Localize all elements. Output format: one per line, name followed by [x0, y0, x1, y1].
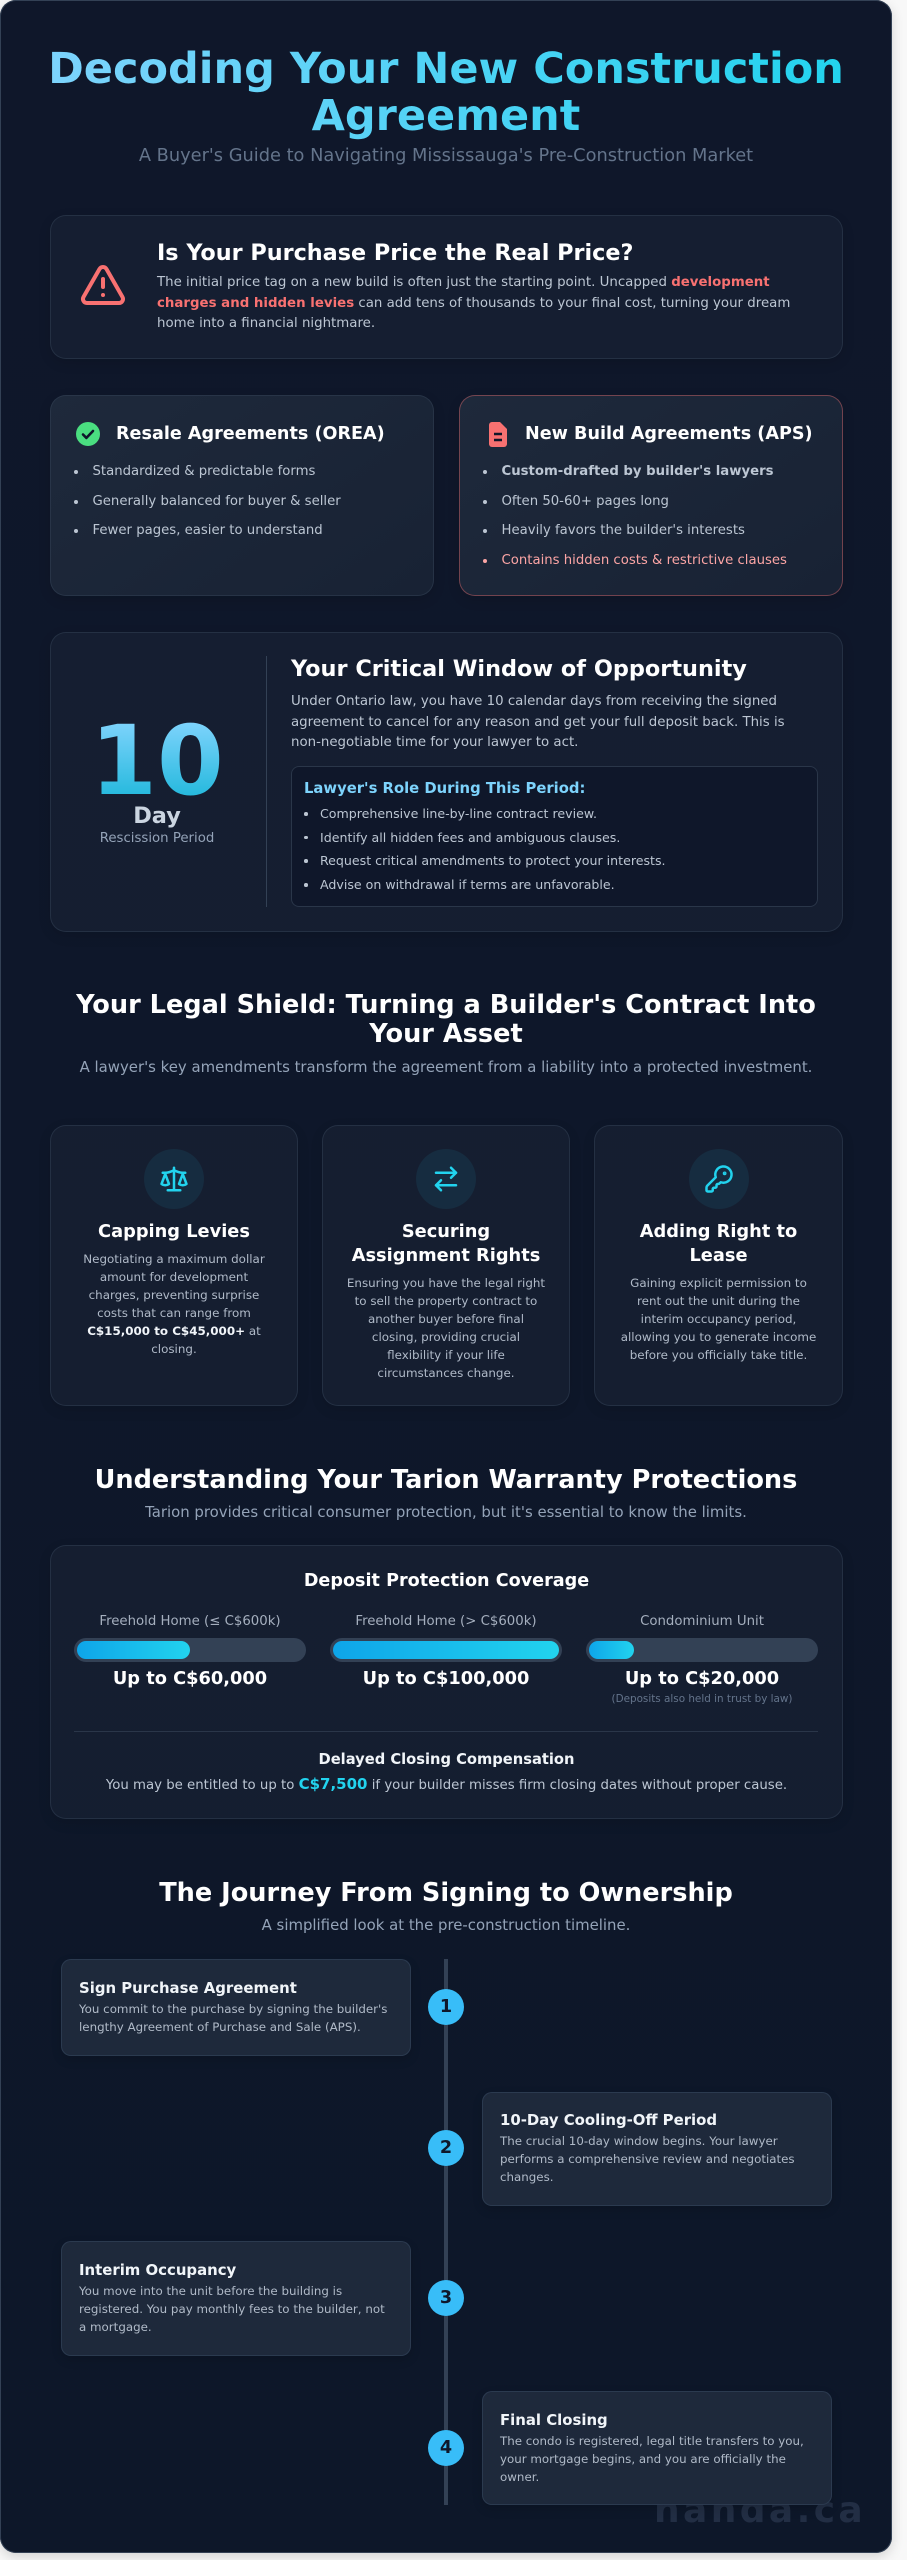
- step 1 marker: 1: [440, 1997, 452, 2017]
- subtitle: legal shield: A lawyer's key amendments transform the agreement from a liability into a protected investment.: [80, 1058, 812, 1076]
- step 1 text: You commit to the purchase by signing the builder's: [79, 2002, 387, 2016]
- list: new build features: [483, 464, 787, 568]
- step 4 text: [500, 2434, 804, 2484]
- text: price explanation: charges and hidden levies can add tens of thousands to your final cost, turning your dream: [157, 296, 790, 311]
- heading: resale: Resale Agreements (OREA): [116, 424, 385, 444]
- title: [0, 46, 892, 140]
- heading: deposit protection: Deposit Protection Coverage: [304, 1571, 589, 1591]
- value: freehold high: Up to C$100,000: [363, 1668, 529, 1689]
- card: assignment rights: [322, 1125, 570, 1406]
- heading: window: Your Critical Window of Opportunity: [291, 656, 747, 682]
- panel: new build agreements: [459, 395, 843, 596]
- watermark: nanda.ca: [654, 2490, 866, 2531]
- text: capping levies: charges, preventing surprise: [89, 1288, 259, 1302]
- heading: tarion: Understanding Your Tarion Warranty Protections: [95, 1465, 797, 1495]
- heading: new build: New Build Agreements (APS): [525, 424, 813, 444]
- panel: critical window: [50, 632, 843, 932]
- text: ontario law: [291, 694, 785, 750]
- step 4 text: your mortgage begins, and you are officially the: [500, 2452, 786, 2466]
- icon: scale: [144, 1149, 204, 1209]
- list: new build features: Custom-drafted by builder's lawyers: [502, 464, 774, 479]
- bar: freehold low: [74, 1638, 306, 1662]
- panel: purchase price warning: [50, 215, 843, 359]
- heading: delayed closing: Delayed Closing Compensation: [319, 1751, 574, 1768]
- step 3 marker: [428, 2280, 464, 2316]
- divider: [74, 1731, 818, 1732]
- text: right to lease: before you officially take title.: [630, 1348, 807, 1362]
- step 1 title: Sign Purchase Agreement: [79, 1979, 297, 1997]
- step 3 text: [79, 2284, 385, 2334]
- text: capping levies: amount for development: [100, 1270, 248, 1284]
- text: capping levies: Negotiating a maximum dollar: [83, 1252, 265, 1266]
- label: rescission period: Rescission Period: [100, 831, 214, 846]
- value: freehold low: Up to C$60,000: [113, 1668, 267, 1689]
- list: new build features: Heavily favors the builder's interests: [502, 523, 745, 538]
- heading: legal shield: Your Legal Shield: Turning a Builder's Contract Into: [76, 990, 816, 1020]
- heading: journey: The Journey From Signing to Ownership: [159, 1878, 733, 1908]
- timeline: [61, 1959, 832, 2505]
- text: assignment rights: flexibility if your life: [387, 1348, 505, 1362]
- step 3 text: You move into the unit before the building is: [79, 2284, 342, 2298]
- label: freehold high: Freehold Home (> C$600k): [355, 1614, 537, 1629]
- step 4 text: The condo is registered, legal title transfers to you,: [500, 2434, 804, 2448]
- bar: condominium: [586, 1638, 818, 1662]
- step 3 text: registered. You pay monthly fees to the builder, not: [79, 2302, 385, 2316]
- step 4 text: owner.: [500, 2470, 539, 2484]
- bar: freehold high: [330, 1638, 562, 1662]
- heading: real price: Is Your Purchase Price the Real Price?: [157, 240, 633, 266]
- heading: legal shield: [76, 990, 816, 1049]
- text: assignment rights: [347, 1276, 545, 1380]
- text: price explanation: The initial price tag on a new build is often just the starting point. Uncapped development: [157, 275, 770, 290]
- step 2 marker: 2: [440, 2138, 452, 2158]
- text: right to lease: [621, 1276, 816, 1362]
- icon: arrows: [416, 1149, 476, 1209]
- step 3 title: Interim Occupancy: [79, 2261, 236, 2279]
- list: resale features: [74, 464, 341, 538]
- text: assignment rights: to sell the property contract to: [355, 1294, 537, 1308]
- step 1 card: [61, 1959, 411, 2056]
- list: lawyer tasks: [304, 806, 666, 892]
- step 1 marker: [428, 1989, 464, 2025]
- text: capping levies: C$15,000 to C$45,000+ at: [87, 1324, 261, 1338]
- title: right to lease: Lease: [689, 1245, 748, 1266]
- title: Agreement: [312, 91, 580, 141]
- text: assignment rights: closing, providing crucial: [372, 1330, 520, 1344]
- title: assignment rights: Securing: [402, 1221, 490, 1242]
- text: right to lease: interim occupancy period,: [641, 1312, 796, 1326]
- heading: legal shield: Your Asset: [369, 1019, 523, 1049]
- text: assignment rights: another buyer before final: [368, 1312, 524, 1326]
- title: assignment rights: [352, 1221, 540, 1266]
- divider: [266, 656, 267, 907]
- step 2 text: [500, 2134, 795, 2184]
- card: right to lease: [594, 1125, 843, 1406]
- text: ontario law: non-negotiable time for your lawyer to act.: [291, 735, 578, 750]
- text: ontario law: agreement to cancel for any reason and get your full deposit back. This is: [291, 715, 785, 730]
- text: assignment rights: Ensuring you have the legal right: [347, 1276, 545, 1290]
- timeline line: [444, 1959, 448, 2505]
- label: condominium: Condominium Unit: [640, 1614, 764, 1629]
- text: right to lease: rent out the unit during the: [637, 1294, 800, 1308]
- list: lawyer tasks: Request critical amendments to protect your interests.: [320, 853, 666, 868]
- note: trust: (Deposits also held in trust by law): [612, 1693, 792, 1705]
- step 2 title: 10-Day Cooling-Off Period: [500, 2111, 717, 2129]
- title: right to lease: Adding Right to: [640, 1221, 797, 1242]
- step 3 marker: 3: [440, 2288, 452, 2308]
- panel: resale agreements: [50, 395, 434, 596]
- subtitle: A Buyer's Guide to Navigating Mississauga's Pre-Construction Market: [139, 145, 753, 166]
- text: capping levies: closing.: [151, 1342, 197, 1356]
- label: freehold low: Freehold Home (≤ C$600k): [99, 1614, 281, 1629]
- step 2 text: The crucial 10-day window begins. Your lawyer: [500, 2134, 778, 2148]
- step 2 marker: [428, 2130, 464, 2166]
- list: resale features: Standardized & predictable forms: [92, 464, 315, 479]
- text: right to lease: allowing you to generate income: [621, 1330, 816, 1344]
- label: day: Day: [133, 803, 181, 829]
- step 2 text: performs a comprehensive review and negotiates: [500, 2152, 795, 2166]
- step 4 marker: [428, 2430, 464, 2466]
- step 4 card: [482, 2391, 832, 2505]
- list: lawyer tasks: Identify all hidden fees and ambiguous clauses.: [320, 830, 620, 845]
- list: lawyer tasks: Advise on withdrawal if terms are unfavorable.: [320, 877, 615, 892]
- icon: key: [689, 1149, 749, 1209]
- subtitle: tarion: Tarion provides critical consumer protection, but it's essential to know the limits.: [145, 1503, 747, 1521]
- step 2 text: changes.: [500, 2170, 554, 2184]
- icon: document: [489, 422, 507, 447]
- list: lawyer tasks: Comprehensive line-by-line contract review.: [320, 806, 597, 821]
- text: capping levies: costs that can range from: [97, 1306, 251, 1320]
- step 3 text: a mortgage.: [79, 2320, 152, 2334]
- list: resale features: Fewer pages, easier to understand: [92, 523, 323, 538]
- step 3 card: [61, 2241, 411, 2356]
- text: right to lease: Gaining explicit permission to: [630, 1276, 807, 1290]
- panel: lawyer's role: [291, 766, 818, 907]
- title: Decoding Your New Construction: [48, 44, 844, 94]
- subtitle: journey: A simplified look at the pre-construction timeline.: [262, 1916, 630, 1934]
- value: condominium: Up to C$20,000: [625, 1668, 779, 1689]
- big number 10: 10: [90, 705, 224, 817]
- text: price explanation: home into a financial nightmare.: [157, 316, 375, 331]
- card: capping levies: [50, 1125, 298, 1406]
- text: delayed closing: You may be entitled to up to C$7,500 if your builder misses firm closing dates without proper cause.: [106, 1775, 787, 1793]
- panel: deposit protection: [50, 1545, 843, 1819]
- title: assignment rights: Assignment Rights: [352, 1245, 540, 1266]
- heading: lawyer's role: Lawyer's Role During This Period:: [304, 780, 585, 797]
- title: capping levies: Capping Levies: [98, 1221, 250, 1242]
- step 1 text: lengthy Agreement of Purchase and Sale (APS).: [79, 2020, 361, 2034]
- text: price explanation: [156, 275, 790, 331]
- list: new build features: Often 50-60+ pages long: [502, 494, 669, 509]
- text: assignment rights: circumstances change.: [377, 1366, 515, 1380]
- step 1 text: [79, 2002, 387, 2034]
- icon: check circle: [76, 422, 100, 446]
- text: ontario law: Under Ontario law, you have 10 calendar days from receiving the signed: [291, 694, 777, 709]
- step 2 card: [482, 2092, 832, 2206]
- step 4 title: Final Closing: [500, 2411, 608, 2429]
- step 4 marker: 4: [440, 2438, 452, 2458]
- icon: warning triangle: [80, 265, 125, 305]
- text: capping levies: [83, 1252, 265, 1356]
- list: new build features: Contains hidden costs & restrictive clauses: [502, 553, 787, 568]
- list: resale features: Generally balanced for buyer & seller: [92, 494, 341, 509]
- title: right to lease: [640, 1221, 797, 1266]
